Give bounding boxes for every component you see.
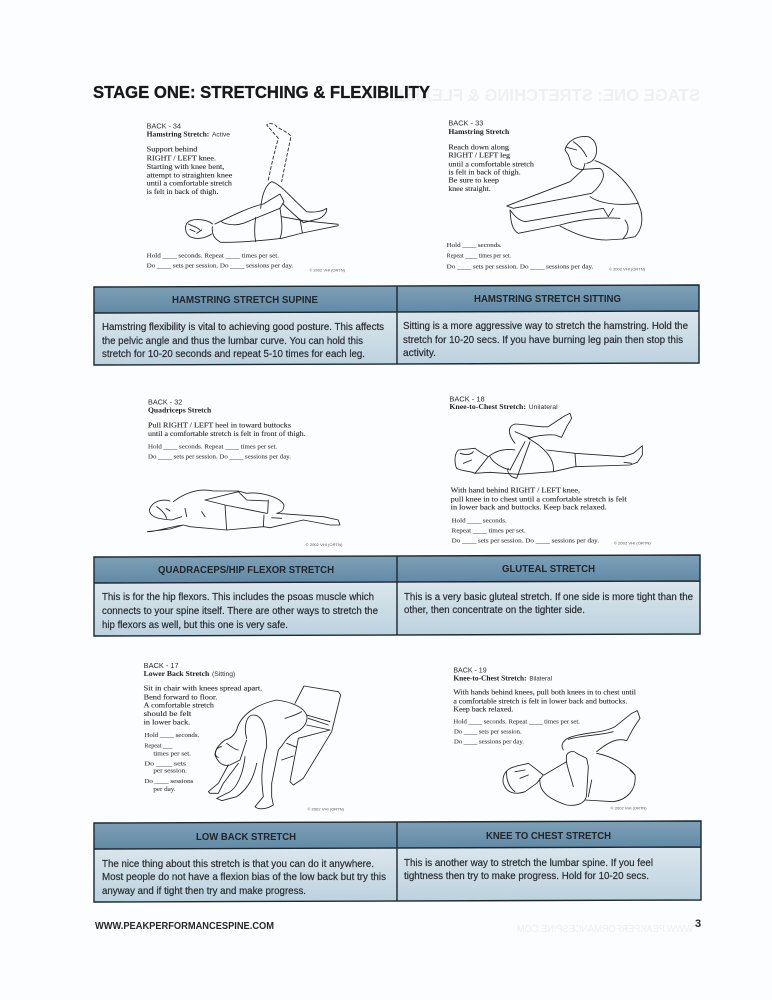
title: STAGE ONE: STRETCHING & FLEXIBILITY — [93, 82, 430, 102]
card text — [453, 668, 647, 810]
card text: attempt to straighten knee — [147, 170, 233, 179]
card text: Hold ____ seconds. Repeat ____ times per set. — [453, 719, 580, 726]
text block: quadraceps hip flexor stretch — [94, 582, 397, 636]
text block: quadraceps hip flexor stretch: This is for the hip flexors. This includes the psoas muscle which — [102, 592, 374, 603]
card text — [144, 663, 344, 811]
card text: Hold ____ seconds. Repeat ____ times per set. — [147, 252, 279, 259]
panel: lower back stretch sitting exercise card — [144, 663, 344, 811]
card text: is felt in back of thigh. — [147, 187, 218, 196]
card text: Knee-to-Chest Stretch: — [449, 403, 526, 411]
header: quadraceps hip flexor stretch: QUADRACEPS/HIP FLEXOR STRETCH — [158, 565, 334, 576]
card text — [148, 400, 342, 547]
card text: BACK - 34 — [147, 123, 181, 130]
text block: knee to chest stretch — [397, 847, 701, 901]
card text: Support behind — [147, 145, 198, 154]
card text: in lower back and buttocks. Keep back relaxed. — [451, 502, 607, 511]
text block: low back stretch: The nice thing about this stretch is that you can do it anywhere. — [102, 859, 374, 870]
panel: hamstring info table — [94, 285, 699, 365]
card text: knee straight. — [448, 184, 491, 193]
card text: Bilateral — [529, 677, 552, 683]
card text: Pull RIGHT / LEFT heel in toward buttocks — [148, 421, 291, 430]
card text: times per set. — [153, 750, 191, 757]
footer website: WWW.PEAKPERFORMANCESPINE.COM — [95, 921, 274, 932]
card text: Do ____ sessions — [144, 778, 194, 785]
text block: low back stretch: Most people do not have a flexion bias of the low back but try this — [102, 872, 386, 883]
card text: © 2002 VHI (ORTN) — [614, 541, 651, 545]
card text: Hold ____ seconds. — [144, 732, 200, 739]
card text: Hold ____ seconds. — [452, 517, 507, 524]
panel: low back and knee to chest info table — [94, 821, 701, 902]
card text: Do ____ sessions per day. — [454, 738, 524, 745]
card text: BACK - 17 — [144, 663, 179, 670]
card text: A comfortable stretch — [144, 701, 214, 710]
header: low back stretch — [94, 822, 397, 849]
card text: Hamstring Stretch — [448, 128, 509, 136]
panel: knee-to-chest unilateral exercise card — [449, 397, 651, 545]
card text: Repeat ___ — [144, 743, 173, 750]
text block: low back stretch — [94, 848, 397, 902]
text block: hamstring stretch supine: stretch for 10-20 seconds and repeat 5-10 times for each leg. — [102, 349, 365, 360]
card text: Knee-to-Chest Stretch: — [453, 675, 527, 683]
card text: Starting with knee bent, — [147, 162, 224, 171]
card text: Reach down along — [448, 142, 509, 151]
card text: © 2002 VHI (ORTN) — [609, 268, 645, 272]
card text: Be sure to keep — [448, 176, 499, 185]
header: hamstring stretch supine: HAMSTRING STRETCH SUPINE — [172, 295, 318, 306]
card text: Do ____ sets per session. — [454, 728, 522, 735]
card text: a comfortable stretch is felt in lower back and buttocks. — [453, 696, 627, 705]
card text: BACK - 18 — [449, 397, 485, 404]
card text: Hold ____ seconds. Repeat ____ times per set. — [148, 443, 278, 450]
card text: Unilateral — [529, 405, 558, 411]
text block: hamstring stretch supine — [94, 312, 397, 365]
panel: quadriceps and gluteal info table — [94, 555, 700, 636]
card text: Do ____ sets — [144, 760, 187, 767]
card text: © 2002 VHI (ORTN) — [309, 268, 345, 272]
text block: hamstring stretch supine: the pelvic angle and thus the lumbar curve. You can hold this — [102, 336, 363, 347]
card text: © 2002 VHI (ORTN) — [307, 807, 344, 811]
card text: Do ____ sets per session. Do ____ sessions per day. — [147, 263, 294, 270]
card text: Hamstring Stretch: — [147, 130, 209, 138]
card text: Do ____ sets per session. Do ____ sessions per day. — [447, 264, 594, 271]
card text: Sit in chair with knees spread apart. — [144, 684, 262, 693]
text block: low back stretch: anyway and if tight then try and make progress. — [102, 886, 306, 897]
icon: person pulling one knee to chest — [455, 413, 642, 478]
header: hamstring stretch supine — [94, 286, 397, 313]
card text: © 2002 VHI (ORTN) — [306, 543, 342, 547]
icon: seated person reaching for toes — [507, 136, 642, 240]
header: low back stretch: LOW BACK STRETCH — [196, 832, 296, 843]
header: quadraceps hip flexor stretch — [94, 556, 397, 583]
text block: gluteal stretch — [397, 581, 700, 635]
text block: knee to chest stretch: This is another way to stretch the lumbar spine. If you feel — [404, 858, 653, 869]
card text: per session. — [153, 768, 187, 775]
text block: quadraceps hip flexor stretch: hip flexors as well, but this one is very safe. — [102, 620, 288, 631]
card text: until a comfortable stretch — [147, 179, 232, 188]
card text: Bend forward to floor. — [144, 692, 217, 701]
card text: should be felt — [144, 709, 192, 718]
header: knee to chest stretch — [397, 821, 701, 848]
text block: hamstring stretch sitting: stretch for 10-20 secs. If you have burning leg pain then stop this — [403, 335, 683, 346]
text block: quadraceps hip flexor stretch: connects to your spine itself. There are other ways to stretch the — [102, 606, 378, 617]
card text: Lower Back Stretch — [144, 670, 209, 678]
card text: until a comfortable stretch is felt in front of thigh. — [148, 429, 306, 438]
card text: is felt in back of thigh. — [448, 167, 521, 176]
card text: pull knee in to chest until a comfortable stretch is felt — [451, 494, 628, 503]
card text: BACK - 32 — [148, 400, 182, 407]
header: gluteal stretch — [397, 555, 700, 582]
card text: BACK - 19 — [453, 668, 487, 675]
card text: With hand behind RIGHT / LEFT knee, — [451, 486, 580, 495]
card text: Quadriceps Stretch — [148, 407, 211, 415]
card text — [449, 397, 651, 545]
panel: hamstring stretch active exercise card — [147, 123, 345, 272]
card text: Repeat ____ times per set. — [452, 527, 526, 534]
header: gluteal stretch: GLUTEAL STRETCH — [502, 564, 595, 575]
card text: per day. — [153, 786, 176, 793]
header: hamstring stretch sitting: HAMSTRING STRETCH SITTING — [474, 294, 621, 305]
card text: Do ____ sets per session. Do ____ sessions per day. — [148, 454, 291, 461]
card text: RIGHT / LEFT leg — [448, 151, 510, 160]
icon: person pulling both knees to chest — [503, 711, 640, 805]
card text: until a comfortable stretch — [448, 159, 534, 168]
card text: Hold ____ seconds. — [447, 242, 502, 249]
page number: 3 — [695, 918, 701, 930]
card text: BACK - 33 — [448, 120, 483, 127]
header: knee to chest stretch: KNEE TO CHEST STRETCH — [486, 831, 611, 842]
icon: person lying on back stretching hamstring — [186, 124, 338, 242]
text block: gluteal stretch: This is a very basic gluteal stretch. If one side is more tight than the — [404, 592, 693, 603]
text block: hamstring stretch sitting: activity. — [403, 348, 436, 359]
card text: Do ____ sets per session. Do ____ sessions per day. — [452, 537, 599, 544]
card text: With hands behind knees, pull both knees in to chest until — [453, 688, 636, 697]
text block: hamstring stretch supine: Hamstring flexibility is vital to achieving good posture. This affects — [102, 322, 384, 333]
panel: quadriceps stretch exercise card — [147, 400, 342, 547]
card text: Keep back relaxed. — [453, 704, 513, 713]
card text: RIGHT / LEFT knee. — [147, 153, 216, 162]
panel: hamstring stretch sitting exercise card — [447, 120, 645, 272]
card text: Active — [212, 132, 231, 138]
mirrored show-through footer: WWW.PEAKPERFORMANCESPINE.COM — [517, 924, 693, 935]
card text — [447, 120, 645, 272]
text block: gluteal stretch: other, then concentrate on the tighter side. — [404, 605, 585, 616]
icon: person bending forward in chair — [208, 686, 341, 809]
card text: © 2002 VHI (ORTN) — [611, 806, 647, 810]
card text: in lower back. — [144, 718, 190, 727]
header: hamstring stretch sitting — [397, 285, 699, 312]
icon: person lying on side pulling heel — [147, 490, 340, 532]
panel: knee-to-chest bilateral exercise card — [453, 668, 647, 810]
card text: Repeat ____ times per set. — [447, 253, 511, 260]
text block: hamstring stretch sitting: Sitting is a more aggressive way to stretch the hamstring. Hold the — [403, 321, 688, 332]
card text: (Sitting) — [212, 672, 235, 678]
text block: knee to chest stretch: tightness then try to make progress. Hold for 10-20 secs. — [404, 871, 649, 882]
mirrored show-through title: STAGE ONE: STRETCHING & FLEXIBILITY — [363, 85, 700, 105]
text block: hamstring stretch sitting — [397, 311, 699, 364]
card text — [147, 123, 345, 272]
